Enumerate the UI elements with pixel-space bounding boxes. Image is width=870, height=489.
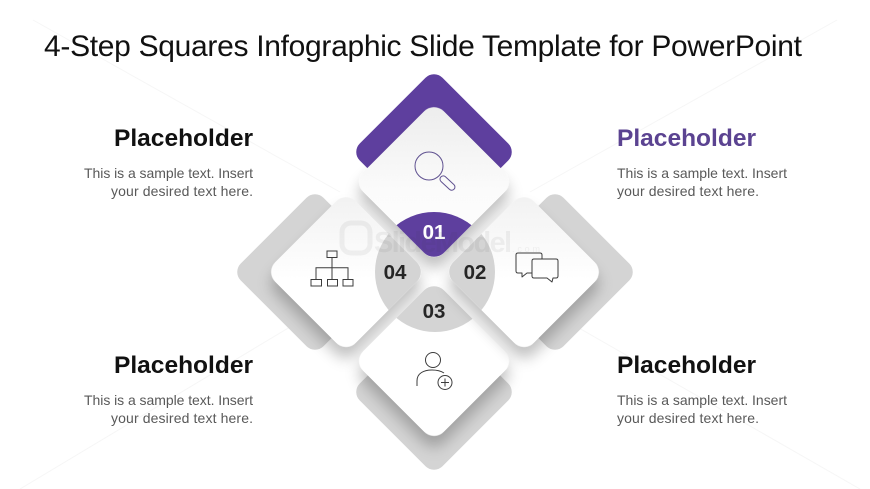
number 03: 03	[423, 300, 445, 323]
watermark: SlideModel	[374, 227, 512, 259]
number 04: 04	[384, 261, 407, 284]
text block: bottom left: your desired text here.	[111, 410, 253, 426]
back square: step 1 purple	[351, 69, 517, 235]
text block: top right	[617, 125, 787, 199]
text block: top left: Placeholder	[114, 125, 253, 152]
text block: top right: This is a sample text. Insert	[617, 165, 787, 181]
title: 4-Step Squares Infographic Slide Template for PowerPoint	[44, 30, 803, 63]
icon: org chart	[311, 251, 353, 286]
text block: bottom right: Placeholder	[617, 352, 756, 379]
number wedge 03	[396, 286, 472, 332]
watermark: .com	[512, 244, 540, 254]
text block: top left: your desired text here.	[111, 183, 253, 199]
card: step 2	[443, 198, 604, 364]
number wedge 04	[375, 234, 421, 310]
text block: top left: This is a sample text. Insert	[84, 165, 253, 181]
text block: bottom right: This is a sample text. Insert	[617, 392, 787, 408]
text block: bottom right	[617, 352, 787, 426]
text block: top right: Placeholder	[617, 125, 756, 152]
number wedge 01	[396, 212, 472, 257]
text block: top left	[84, 125, 253, 199]
back square: step 2 grey	[472, 189, 638, 355]
icon: add user	[417, 352, 452, 390]
text block: bottom left: Placeholder	[114, 352, 253, 379]
back square: step 4 grey	[232, 189, 398, 355]
icon: magnifier	[415, 152, 456, 192]
icon: chat bubbles	[516, 253, 558, 282]
card: step 4	[266, 198, 427, 364]
text block: top right: your desired text here.	[617, 183, 759, 199]
text block: bottom left	[84, 352, 253, 426]
number 02: 02	[464, 261, 486, 284]
number wedge 02	[449, 234, 495, 310]
number 01: 01	[423, 221, 445, 244]
card: step 3	[353, 286, 515, 452]
back square: step 3 grey	[351, 309, 517, 475]
text block: bottom right: your desired text here.	[617, 410, 759, 426]
card: step 1	[353, 106, 515, 274]
watermark	[342, 223, 540, 259]
text block: bottom left: This is a sample text. Insert	[84, 392, 253, 408]
